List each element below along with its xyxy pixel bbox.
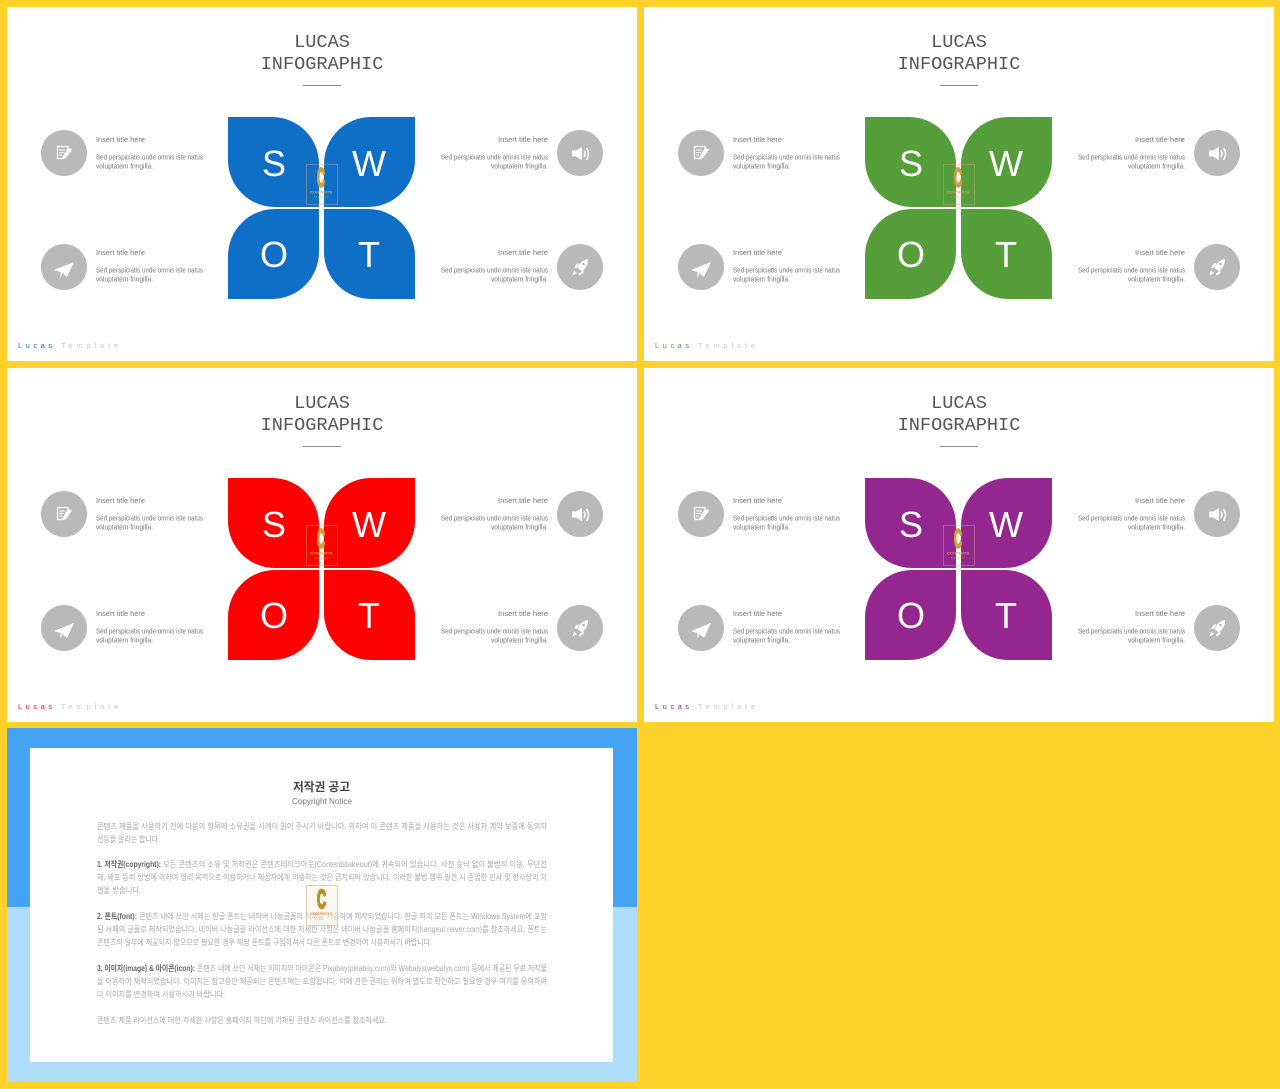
section: font bbox=[97, 911, 547, 947]
item: bottom left: Insert title here bbox=[733, 248, 782, 257]
footer: Lucas bbox=[655, 702, 689, 711]
item: top right: voluptatem fringilla. bbox=[1128, 522, 1185, 532]
footer bbox=[18, 341, 118, 350]
title bbox=[898, 32, 1020, 75]
watermark logo: CONTENTS bbox=[310, 190, 332, 194]
SWOT petal diagram: W bbox=[352, 504, 386, 545]
notice intro: 콘텐츠 제품을 사용하기 전에 다음의 항목에 소유권을 사례이 읽어 주시기 바랍니다. 위하여 이 콘텐츠 제품을 사용하는 것은 사용자 계약 보증에 동의하 bbox=[97, 821, 547, 831]
item: bottom right: Insert title here bbox=[498, 248, 548, 257]
item: bottom right bbox=[1078, 605, 1240, 651]
watermark logo: TAKEOUT bbox=[951, 556, 965, 560]
item: top right: Insert title here bbox=[1135, 496, 1185, 505]
footer: Lucas bbox=[18, 341, 52, 350]
section: image and icon: 다 이미지를 변경하여 사용하시기 바랍니다. bbox=[97, 989, 225, 999]
watermark logo: TAKEOUT bbox=[314, 556, 328, 560]
watermark logo: CONTENTS bbox=[947, 550, 969, 556]
section: image and icon: 콘텐츠 내에 쓰인 서체는 이미지와 아이콘은 Pixabay(pixabay.com)와 Webalys(webalys.com) 등에서 제공된 무료 저작물 bbox=[197, 963, 547, 973]
item: bottom left bbox=[678, 244, 840, 290]
title: INFOGRAPHIC bbox=[898, 415, 1020, 436]
item: top left bbox=[678, 130, 840, 176]
title: LUCAS bbox=[294, 32, 350, 53]
watermark logo bbox=[944, 524, 974, 566]
section: font: 콘텐츠 내에 쓰인 서체는 한글 폰트는 네이버 나눔글꼴의 서체를 사용하여 제작되었습니다. 한글 외의 모든 폰트는 Windows System에 포함 bbox=[139, 911, 547, 921]
title: LUCAS bbox=[931, 393, 987, 414]
title bbox=[898, 393, 1020, 436]
item: top right: Sed perspiciatis unde omnis iste natus bbox=[1078, 514, 1185, 522]
notice intro bbox=[97, 821, 547, 844]
footer bbox=[655, 341, 755, 350]
item: bottom right: Sed perspiciatis unde omnis iste natus bbox=[1078, 626, 1185, 636]
item: top right: Sed perspiciatis unde omnis iste natus bbox=[441, 152, 548, 162]
footer bbox=[18, 702, 118, 711]
item: top left: Insert title here bbox=[96, 135, 145, 144]
item: top left: voluptatem fringilla. bbox=[733, 522, 790, 532]
panel: red SWOT slide bbox=[7, 368, 637, 722]
SWOT petal diagram bbox=[865, 478, 1052, 660]
panel: copyright notice bbox=[7, 728, 637, 1082]
item: top left bbox=[41, 130, 203, 176]
footer bbox=[655, 702, 755, 711]
watermark logo: C bbox=[317, 524, 325, 554]
SWOT petal diagram bbox=[228, 478, 415, 660]
notice heading: Copyright Notice bbox=[292, 797, 352, 806]
SWOT petal diagram bbox=[228, 117, 415, 299]
watermark logo: C bbox=[954, 524, 962, 554]
SWOT petal diagram: T bbox=[358, 595, 380, 636]
watermark logo bbox=[306, 884, 338, 926]
item: bottom left: voluptatem fringilla. bbox=[733, 274, 790, 284]
item: top left bbox=[41, 491, 203, 537]
item: bottom right: Insert title here bbox=[1135, 609, 1185, 618]
item: top right: voluptatem fringilla. bbox=[491, 522, 548, 532]
section: image and icon: 3. 이미지(image) & 아이콘(icon): bbox=[97, 963, 195, 973]
watermark logo: CONTENTS bbox=[310, 911, 332, 916]
notice heading bbox=[292, 779, 352, 806]
item: bottom left: Insert title here bbox=[96, 609, 145, 618]
footer: Lucas bbox=[18, 702, 52, 711]
SWOT petal diagram: O bbox=[897, 595, 925, 636]
item: bottom right: voluptatem fringilla. bbox=[491, 636, 548, 644]
item: top right: voluptatem fringilla. bbox=[491, 162, 548, 170]
section: font: 콘텐츠의 일부에 제공되지 않으므로 필요한 경우 해당 폰트를 구입하셔서 다른 폰트로 변경하여 사용하시기 바랍니다. bbox=[97, 937, 432, 947]
watermark logo: C bbox=[317, 884, 326, 914]
watermark logo: CONTENTS bbox=[310, 550, 332, 556]
item: top right bbox=[1078, 491, 1240, 537]
item: bottom right: Insert title here bbox=[1135, 248, 1185, 257]
watermark logo bbox=[306, 524, 338, 566]
item: top right bbox=[441, 491, 603, 537]
title: INFOGRAPHIC bbox=[261, 54, 383, 75]
item: top left bbox=[678, 491, 840, 537]
SWOT petal diagram: T bbox=[995, 595, 1017, 636]
item: top left: Sed perspiciatis unde omnis iste natus bbox=[96, 152, 203, 162]
item: bottom left: Insert title here bbox=[96, 248, 145, 257]
panel: blue SWOT slide bbox=[7, 7, 637, 361]
item: bottom right bbox=[441, 244, 603, 290]
section: font: 2. 폰트(font): bbox=[97, 912, 137, 921]
SWOT petal diagram: S bbox=[262, 143, 286, 184]
watermark logo: C bbox=[954, 162, 962, 192]
item: top left: Sed perspiciatis unde omnis iste natus bbox=[733, 152, 840, 162]
item: top left: voluptatem fringilla. bbox=[733, 162, 790, 170]
item: bottom left: Sed perspiciatis unde omnis iste natus bbox=[96, 266, 203, 274]
panel: green SWOT slide bbox=[644, 7, 1274, 361]
item: top left: Insert title here bbox=[96, 496, 145, 505]
item: bottom right: Sed perspiciatis unde omnis iste natus bbox=[441, 626, 548, 636]
item: bottom left: Sed perspiciatis unde omnis iste natus bbox=[733, 266, 840, 274]
footer: Template bbox=[61, 341, 118, 350]
SWOT petal diagram: S bbox=[899, 504, 923, 545]
notice closing line: 콘텐츠 제품 라이선스에 대한 자세한 사항은 홈페이지 하단에 기재된 콘텐츠 라이선스를 참조하세요. bbox=[97, 1015, 387, 1025]
item: bottom right: Sed perspiciatis unde omnis iste natus bbox=[1078, 266, 1185, 274]
SWOT petal diagram: O bbox=[897, 234, 925, 275]
item: top left: Insert title here bbox=[733, 135, 782, 144]
notice intro: 선동을 알리는 합니다. bbox=[97, 834, 160, 844]
footer: Template bbox=[61, 702, 118, 711]
watermark logo: C bbox=[317, 162, 325, 192]
section: copyright: 벌을 받습니다. bbox=[97, 885, 141, 895]
item: bottom left: voluptatem fringilla. bbox=[733, 636, 790, 644]
item: bottom left: voluptatem fringilla. bbox=[96, 636, 153, 644]
SWOT petal diagram: S bbox=[899, 143, 923, 184]
item: top right bbox=[441, 130, 603, 176]
watermark logo: TAKEOUT bbox=[314, 195, 328, 199]
SWOT petal diagram: W bbox=[352, 143, 386, 184]
title bbox=[261, 393, 383, 436]
section: copyright: 모든 콘텐츠의 소유 및 저작권은 콘텐츠테이크아웃(Contentstakeout)에 귀속되어 있습니다. 사전 승낙 없이 불법적 이용, 무단전 bbox=[163, 859, 547, 869]
item: bottom left: voluptatem fringilla. bbox=[96, 274, 153, 284]
item: bottom left: Sed perspiciatis unde omnis iste natus bbox=[733, 626, 840, 636]
section: copyright bbox=[97, 859, 547, 895]
item: bottom right bbox=[441, 605, 603, 651]
item: bottom left: Sed perspiciatis unde omnis iste natus bbox=[96, 626, 203, 636]
item: top right: Sed perspiciatis unde omnis iste natus bbox=[1078, 152, 1185, 162]
watermark logo bbox=[944, 162, 974, 204]
title: INFOGRAPHIC bbox=[898, 54, 1020, 75]
item: bottom left bbox=[41, 605, 203, 651]
section: copyright: 재, 배포 등의 방법에 의하여 영리 목적으로 이용하거나 제삼자에게 이용하는 것은 금지되어 있습니다. 이러한 불법 행위 발견 시 준엄한 민사 및 형사상의 처 bbox=[97, 872, 547, 882]
item: bottom left bbox=[41, 244, 203, 290]
item: top right: voluptatem fringilla. bbox=[1128, 162, 1185, 170]
SWOT petal diagram: W bbox=[989, 504, 1023, 545]
panel: purple SWOT slide bbox=[644, 368, 1274, 722]
item: bottom right: voluptatem fringilla. bbox=[491, 274, 548, 284]
watermark logo bbox=[306, 162, 338, 204]
SWOT petal diagram: T bbox=[358, 234, 380, 275]
item: top left: Insert title here bbox=[733, 496, 782, 505]
item: bottom right bbox=[1078, 244, 1240, 290]
SWOT petal diagram: S bbox=[262, 504, 286, 545]
section: copyright: 1. 저작권(copyright): bbox=[97, 859, 161, 869]
title: LUCAS bbox=[294, 393, 350, 414]
SWOT petal diagram: O bbox=[260, 595, 288, 636]
item: bottom right: voluptatem fringilla. bbox=[1128, 274, 1185, 284]
watermark logo: CONTENTS bbox=[947, 190, 969, 194]
footer: Template bbox=[698, 341, 755, 350]
item: top left: Sed perspiciatis unde omnis iste natus bbox=[733, 514, 840, 522]
SWOT petal diagram: T bbox=[995, 234, 1017, 275]
title: LUCAS bbox=[931, 32, 987, 53]
section: font: 된 서체의 글꼴로 제작되었습니다. 네이버 나눔글꼴 라이선스에 대한 자세한 사항은 네이버 나눔글꼴 홈페이지(hangeul.naver.com)를 참조하세요. 폰트는 bbox=[97, 924, 547, 934]
item: bottom left bbox=[678, 605, 840, 651]
footer: Lucas bbox=[655, 341, 689, 350]
footer: Template bbox=[698, 702, 755, 711]
item: bottom right: Sed perspiciatis unde omnis iste natus bbox=[441, 266, 548, 274]
watermark logo: TAKEOUT bbox=[951, 195, 965, 199]
SWOT petal diagram: O bbox=[260, 234, 288, 275]
item: top right: Insert title here bbox=[1135, 135, 1185, 144]
item: bottom right: Insert title here bbox=[498, 609, 548, 618]
item: top left: voluptatem fringilla. bbox=[96, 522, 153, 532]
item: top right: Insert title here bbox=[498, 496, 548, 505]
item: top right: Sed perspiciatis unde omnis iste natus bbox=[441, 514, 548, 522]
item: top right bbox=[1078, 130, 1240, 176]
section: image and icon bbox=[97, 963, 547, 999]
item: top left: voluptatem fringilla. bbox=[96, 162, 153, 170]
SWOT petal diagram: W bbox=[989, 143, 1023, 184]
section: image and icon: 을 이용하여 제작되었습니다. 이미지는 참고용만 제공되는 콘텐츠에는 포함됩니다. 이에 관한 권리는 위하여 별도로 확인하고 필요한 경우 여기를 유의하여 bbox=[97, 976, 547, 986]
item: bottom left: Insert title here bbox=[733, 609, 782, 618]
title bbox=[261, 32, 383, 75]
item: bottom right: voluptatem fringilla. bbox=[1128, 636, 1185, 644]
item: top left: Sed perspiciatis unde omnis iste natus bbox=[96, 514, 203, 522]
title: INFOGRAPHIC bbox=[261, 415, 383, 436]
SWOT petal diagram bbox=[865, 117, 1052, 299]
item: top right: Insert title here bbox=[498, 135, 548, 144]
notice heading: 저작권 공고 bbox=[293, 779, 350, 794]
